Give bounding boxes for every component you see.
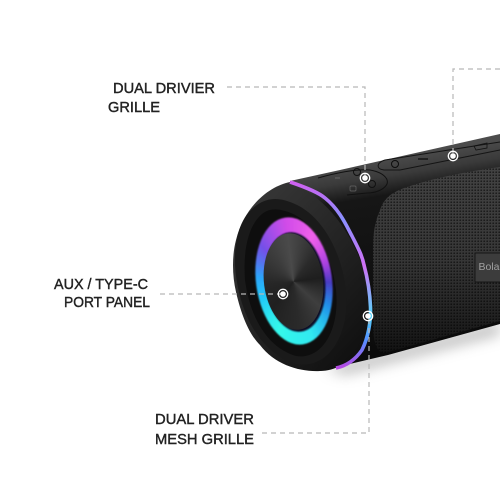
metal disc <box>250 220 340 345</box>
marker: dual driver grille <box>360 173 370 183</box>
label: dual drivier grille: GRILLE <box>108 100 160 116</box>
marker: mesh grille <box>363 311 373 321</box>
speaker <box>233 134 500 371</box>
rgb band <box>290 182 371 368</box>
label: dual driver mesh grille <box>155 412 254 448</box>
marker: top panel <box>448 151 458 161</box>
speaker body <box>290 134 500 371</box>
label: dual drivier grille <box>108 81 215 116</box>
label: aux / type-c port panel: AUX / TYPE-C <box>54 277 148 293</box>
label: aux / type-c port panel: PORT PANEL <box>64 295 150 311</box>
label: dual driver mesh grille: DUAL DRIVER <box>155 412 254 428</box>
label: dual driver mesh grille: MESH GRILLE <box>155 432 254 448</box>
label: aux / type-c port panel <box>54 277 150 311</box>
callout lines <box>160 69 500 433</box>
led ring <box>240 200 350 365</box>
marker: port panel <box>278 289 288 299</box>
control panel right <box>378 142 500 170</box>
end cap <box>233 182 371 371</box>
label: dual drivier grille: DUAL DRIVIER <box>113 81 215 97</box>
ground shadow <box>325 322 500 374</box>
logo badge <box>475 253 500 282</box>
inner shadow around disc <box>259 229 331 335</box>
front face recess <box>235 199 346 365</box>
fabric mesh grille <box>373 167 500 353</box>
control panel left <box>318 168 387 195</box>
